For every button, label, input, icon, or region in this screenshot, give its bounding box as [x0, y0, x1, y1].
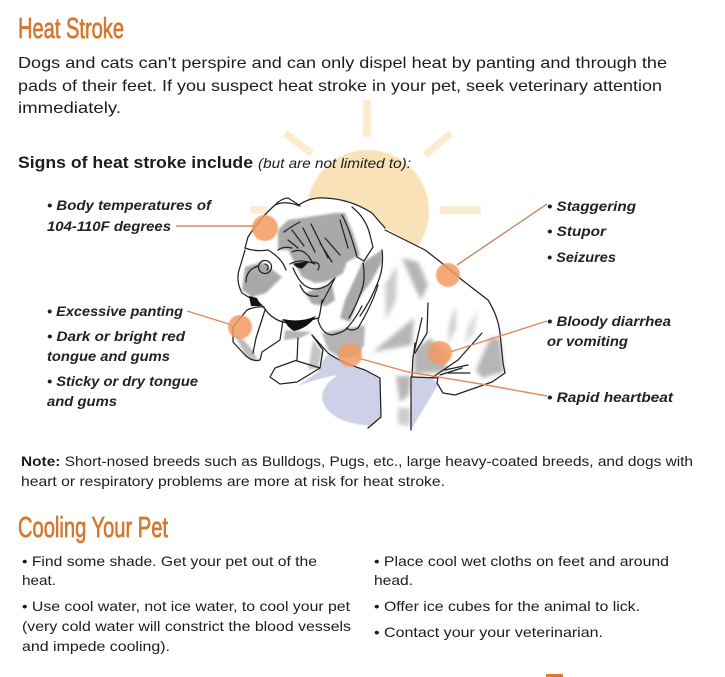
labels: right symptoms: or vomiting — [547, 333, 628, 349]
symptom markers — [228, 215, 460, 367]
labels: right symptoms: • Stupor — [547, 223, 608, 239]
cooling tips: left column: (very cold water will constrict the blood vessels — [22, 618, 351, 634]
callout lines — [176, 204, 547, 396]
cooling tips: right column — [374, 553, 669, 640]
back and rump — [385, 230, 505, 395]
note — [21, 453, 693, 489]
cooling tips: right column: • Place cool wet cloths on feet and around — [374, 553, 669, 569]
heading: Heat Stroke: Heat Stroke — [18, 13, 124, 45]
subheading: signs of heat stroke: (but are not limited to): — [258, 155, 411, 171]
illustration: bulldog — [233, 198, 505, 430]
cooling tips: left column — [22, 553, 351, 654]
cooling tips: left column: • Find some shade. Get your pet out of the — [22, 553, 317, 569]
intro paragraph: pads of their feet. If you suspect heat stroke in your pet, seek veterinary attention — [18, 78, 662, 95]
intro paragraph: immediately. — [18, 100, 121, 117]
chest and front right leg — [312, 335, 381, 428]
cooling tips: right column: • Offer ice cubes for the animal to lick. — [374, 598, 640, 614]
neck folds — [349, 263, 364, 318]
body fold shading — [372, 258, 504, 426]
labels: right symptoms: • Rapid heartbeat — [547, 389, 674, 405]
intro paragraph: Dogs and cats can't perspire and can only dispel heat by panting and through the — [18, 55, 667, 72]
labels: left symptoms: • Body temperatures of — [47, 197, 212, 213]
cooling tips: right column: • Contact your your veterinarian. — [374, 624, 603, 640]
mouth and nose — [249, 296, 316, 331]
note: Note: Short-nosed breeds such as Bulldogs, Pugs, etc., large heavy-coated breeds, and dogs with — [21, 453, 693, 469]
labels: left symptoms — [47, 197, 212, 409]
labels: right symptoms: • Staggering — [547, 198, 636, 214]
labels: right symptoms: • Bloody diarrhea — [547, 313, 671, 329]
heading: Cooling Your Pet: Cooling Your Pet — [18, 512, 168, 544]
labels: left symptoms: 104-110F degrees — [47, 218, 171, 234]
labels: left symptoms: • Excessive panting — [47, 303, 183, 319]
intro paragraph — [18, 55, 667, 117]
ear and head top — [245, 198, 385, 248]
cooling tips: left column: heat. — [22, 572, 56, 588]
labels: left symptoms: • Sticky or dry tongue — [47, 373, 198, 389]
labels: right symptoms: • Seizures — [547, 249, 616, 265]
grey shading — [234, 213, 382, 370]
labels: right symptoms — [547, 198, 674, 405]
muzzle — [238, 248, 286, 298]
cooling tips: right column: head. — [374, 572, 413, 588]
orange mark at bottom edge — [546, 674, 563, 677]
labels: left symptoms: • Dark or bright red — [47, 328, 185, 344]
illustration: sun — [250, 100, 481, 272]
tongue — [233, 307, 283, 360]
dog silhouette fill — [233, 198, 505, 430]
labels: left symptoms: and gums — [47, 393, 117, 409]
forehead wrinkles — [284, 220, 348, 262]
hind leg — [433, 333, 482, 377]
cooling tips: left column: and impede cooling). — [22, 638, 170, 654]
eye — [290, 261, 315, 264]
subheading: signs of heat stroke — [18, 153, 411, 172]
dog outline — [233, 198, 505, 430]
illustration: ground shadow — [298, 352, 438, 428]
cheek folds — [293, 268, 335, 303]
labels: left symptoms: tongue and gums — [47, 348, 170, 364]
cooling tips: left column: • Use cool water, not ice water, to cool your pet — [22, 598, 350, 614]
front left leg and paw — [270, 335, 323, 384]
subheading: signs of heat stroke: Signs of heat stroke include — [18, 153, 253, 172]
note: heart or respiratory problems are more at risk for heat stroke. — [21, 473, 445, 489]
